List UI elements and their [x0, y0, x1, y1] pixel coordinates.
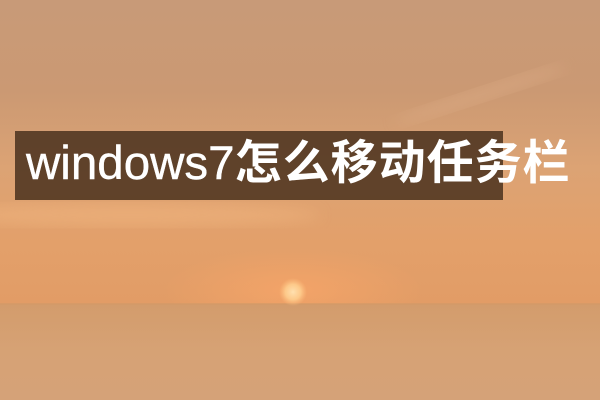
- title backing bar: [15, 131, 503, 200]
- title: windows7怎么移动任务栏: [26, 136, 571, 190]
